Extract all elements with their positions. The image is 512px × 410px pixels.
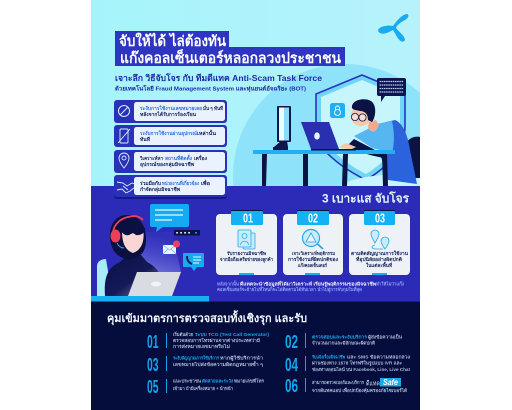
measure 02 text xyxy=(312,332,403,346)
number 02: 02 xyxy=(308,212,318,226)
measure 06 text: สามารถตรวจเบอร์และบริการ xyxy=(312,379,365,385)
icon: handshake xyxy=(117,182,135,193)
heading: 3 clues: 3 เบาะแส จับโจร xyxy=(322,190,410,206)
panel 2: suspend devices xyxy=(114,125,227,147)
infographic canvas xyxy=(91,0,420,410)
panel 3: locate equipment xyxy=(114,150,227,173)
measure 02 text: ผู้ส่งข้อความเป็น xyxy=(368,332,403,340)
analysis summary text: ทำให้ไม่ว่าแก๊ง xyxy=(376,280,405,286)
subtitle line 1: เจาะลึก วิธีจับโจร กับ ทีมดีแทค Anti-Scam Task Force xyxy=(115,73,322,83)
measure 04 text: รับแจ้งเรื่องมิจฉาชีพ xyxy=(312,354,345,360)
title line 2: แก๊งคอลเซ็นเตอร์หลอกลวงประชาชน xyxy=(120,48,341,67)
lock badge xyxy=(330,103,345,118)
measure 01 text xyxy=(173,331,270,349)
panel 1: suspend numbers xyxy=(114,100,227,123)
panel 1 text xyxy=(140,104,224,118)
icon: location pin xyxy=(119,153,129,168)
measure 04 xyxy=(285,354,411,375)
measure 04: 04 xyxy=(285,354,298,375)
panel 3 text: สถานที่ติดตั้ง xyxy=(165,153,193,162)
analyst body xyxy=(339,120,417,184)
card 02 xyxy=(283,210,343,275)
measure 02: 02 xyxy=(285,331,298,352)
title line 1: จับให้ได้ ไล่ต้องทัน xyxy=(119,32,226,50)
analysis summary text: ดีแทคจะนำข้อมูลที่ได้มาวิเคราะห์ เรียนรู้พฤติกรรมของมิจฉาชีพ xyxy=(240,280,376,288)
panel 4: cooperate with agencies xyxy=(114,175,227,199)
heading: proactive and reactive measures: คุมเข้มมาตรการตรวจสอบทั้งเชิงรุก และรับ xyxy=(107,310,307,326)
measure 05 text: แนะประชาชน xyxy=(173,378,202,384)
measure 02 text: จำนวนมากและมีลักษณะผิดปกติ xyxy=(312,340,375,346)
panel 2 text: เหล่านั้น xyxy=(197,128,217,137)
icon: prohibited xyxy=(118,106,130,116)
card 01 text xyxy=(220,250,273,264)
panel 3 text: อุปกรณ์ของกลุ่มมิจฉาชีพ xyxy=(140,161,195,168)
illustration: analyst at desk with shield xyxy=(233,64,420,186)
panel 1 text: หลังจากได้รับการร้องเรียน xyxy=(140,111,197,118)
measure 01: 01 xyxy=(147,331,158,352)
top section background xyxy=(91,0,420,186)
card 03 text: ที่อุปนิสัยอย่างผิดปกติ xyxy=(356,255,402,263)
panel 4 text xyxy=(140,179,210,193)
background circle xyxy=(233,64,420,186)
floor highlight xyxy=(340,174,420,186)
measure 03 text xyxy=(173,354,264,368)
mask xyxy=(121,227,145,235)
measure 05: 05 xyxy=(147,376,158,397)
shield xyxy=(316,75,405,180)
panel 1 text: ระงับการใช้งานเลขหมายเลย xyxy=(140,105,202,112)
card 03 text: ในแต่ละพื้นที่ xyxy=(366,261,392,269)
subtitle line 2: ด้วยเทคโนโลยี Fraud Management System และหุ่นยนต์อัจฉริยะ (BOT) xyxy=(115,84,306,92)
measure 05 xyxy=(147,376,265,397)
chat bubble xyxy=(150,204,189,232)
measure 03 text: เลขหมายไปส่งข้อความผิดกฎหมายซ้ำ ๆ xyxy=(173,360,264,368)
card 02 text xyxy=(288,250,339,269)
number 01: 01 xyxy=(243,212,253,226)
measure 05 text: เข้ามา ถ้ามีเครื่องหมาย + นำหน้า xyxy=(173,385,233,391)
card 01 text: จากมือถือเครือข่ายของลูกค้า xyxy=(220,256,273,264)
measure 04 text xyxy=(312,354,411,372)
measure 05 text: หมายเลขที่โทร xyxy=(234,378,265,384)
card 03 xyxy=(349,210,410,275)
icon: crossed phone xyxy=(118,129,130,143)
shield inner xyxy=(321,80,400,174)
panel 3 text: เครื่อง xyxy=(194,154,208,162)
panel 1 text: มั่น ๆ ทันที xyxy=(203,104,224,112)
illustration: scammer with headset and laptop xyxy=(91,204,209,302)
card 03 text: ตามติดสัญญาณการใช้งาน xyxy=(351,250,409,257)
light beam xyxy=(137,232,181,272)
section: blue 3 clues background xyxy=(91,186,420,302)
subtitle xyxy=(115,73,322,92)
measure 06: 06 xyxy=(285,375,298,396)
dtac wordmark: ดีแทค xyxy=(366,380,380,388)
desk strip xyxy=(91,296,209,302)
phone bubble xyxy=(183,253,204,271)
measure 06 text xyxy=(312,379,407,394)
number 03: 03 xyxy=(375,212,385,226)
analyst head with glasses xyxy=(351,99,375,126)
analysis summary text xyxy=(217,280,405,293)
hood and hair xyxy=(110,215,146,259)
laptop xyxy=(128,272,181,296)
chair xyxy=(97,259,112,296)
face xyxy=(122,228,144,253)
measure 03 text: ระงับสัญญาณการใช้บริการ xyxy=(173,354,219,362)
panel 4 text: กำจัดกลุ่มมิจฉาชีพ xyxy=(140,186,181,193)
panel 3 text xyxy=(140,153,208,168)
title banner xyxy=(115,31,345,67)
measure 02 text: ตรวจสอบและระงับบริการ xyxy=(312,334,368,340)
dtac logo xyxy=(378,14,408,42)
icon: warning magnifier xyxy=(302,230,323,249)
measure 04 text: ช่องทางออนไลน์ บน Facebook, Line, Live Chat xyxy=(312,366,411,372)
card 01 xyxy=(216,210,277,275)
envelope with alert xyxy=(163,240,180,254)
headset xyxy=(110,216,143,248)
measure 01 xyxy=(147,331,270,352)
measure 06 text: จากดีแทคแอป เพื่อปกป้องคุ้มครองภัยไซเบอร์ได้ xyxy=(312,387,407,394)
card 02 text: เจาะวิเคราะห์พฤติกรรม xyxy=(292,250,335,257)
analysis summary text: หลังจากนั้น xyxy=(217,280,240,286)
card 02 text: แก๊งคอลเซ็นเตอร์ xyxy=(298,261,327,269)
icon: profile documents xyxy=(238,230,255,249)
measure 01 text: การส่งหมายเลขมาหรือไม่ xyxy=(173,343,230,349)
measure 03 text: หากผู้ใช้บริการนำ xyxy=(220,354,264,362)
laptop xyxy=(301,122,356,150)
panel 2 text xyxy=(140,128,217,143)
binary speech bubble xyxy=(377,78,406,102)
measure 04 text: ผ่านช่องทาง 1678 โทรฟรีในรูปแบบ IVR และ xyxy=(312,360,403,366)
measure 06 xyxy=(285,375,407,396)
chair xyxy=(407,137,420,178)
panel 4 text: เพื่อ xyxy=(201,179,210,187)
panel 4 text: หน่วยงานที่เกี่ยวข้อง xyxy=(162,179,199,187)
icon: map route pins xyxy=(371,230,389,249)
measure 05 text xyxy=(173,378,265,391)
measure 01 text: ตรวจสอบการโทรผ่านจากต่างประเทศว่ามี xyxy=(173,337,260,343)
measure 01 text: เริ่มต้นด้วย xyxy=(173,331,193,337)
section: dark measures background xyxy=(91,302,420,410)
measure 01 text: ระบบ TCG (Test Call Generator) xyxy=(195,332,270,337)
password pill xyxy=(174,230,200,236)
panel 2 text: ระงับการใช้งานผ่านอุปกรณ์ xyxy=(140,130,197,137)
card 01 text: รับรายงานมิจฉาชีพ xyxy=(227,250,266,257)
measure 05 text: ตัดสายและระวัง xyxy=(202,378,233,384)
measure 03: 03 xyxy=(147,354,158,375)
panel 4 text: ร่วมมือกับ xyxy=(140,180,161,187)
analysis summary text: คอลเซ็นเตอร์จะย้ายไปที่ไหนก็จะไล่ติดตามได้ทันเวลา นำไปสู่การจับกุมในที่สุด xyxy=(217,285,362,293)
panel 3 text: วิเคราะห์หา xyxy=(140,155,163,162)
desk xyxy=(253,150,395,186)
card 02 text: การใช้งานที่ผิดปกติของ xyxy=(288,255,339,263)
monitor xyxy=(273,106,291,150)
measure 02 xyxy=(285,331,403,352)
panel 2 text: ทันที xyxy=(140,136,151,143)
Safe badge: Safe xyxy=(383,378,398,387)
hooded body xyxy=(105,255,162,296)
measure 03 xyxy=(147,354,264,375)
card 03 text xyxy=(351,250,409,269)
measure 04 text: และ SMS ข้อความหลอกลวง xyxy=(347,354,410,360)
